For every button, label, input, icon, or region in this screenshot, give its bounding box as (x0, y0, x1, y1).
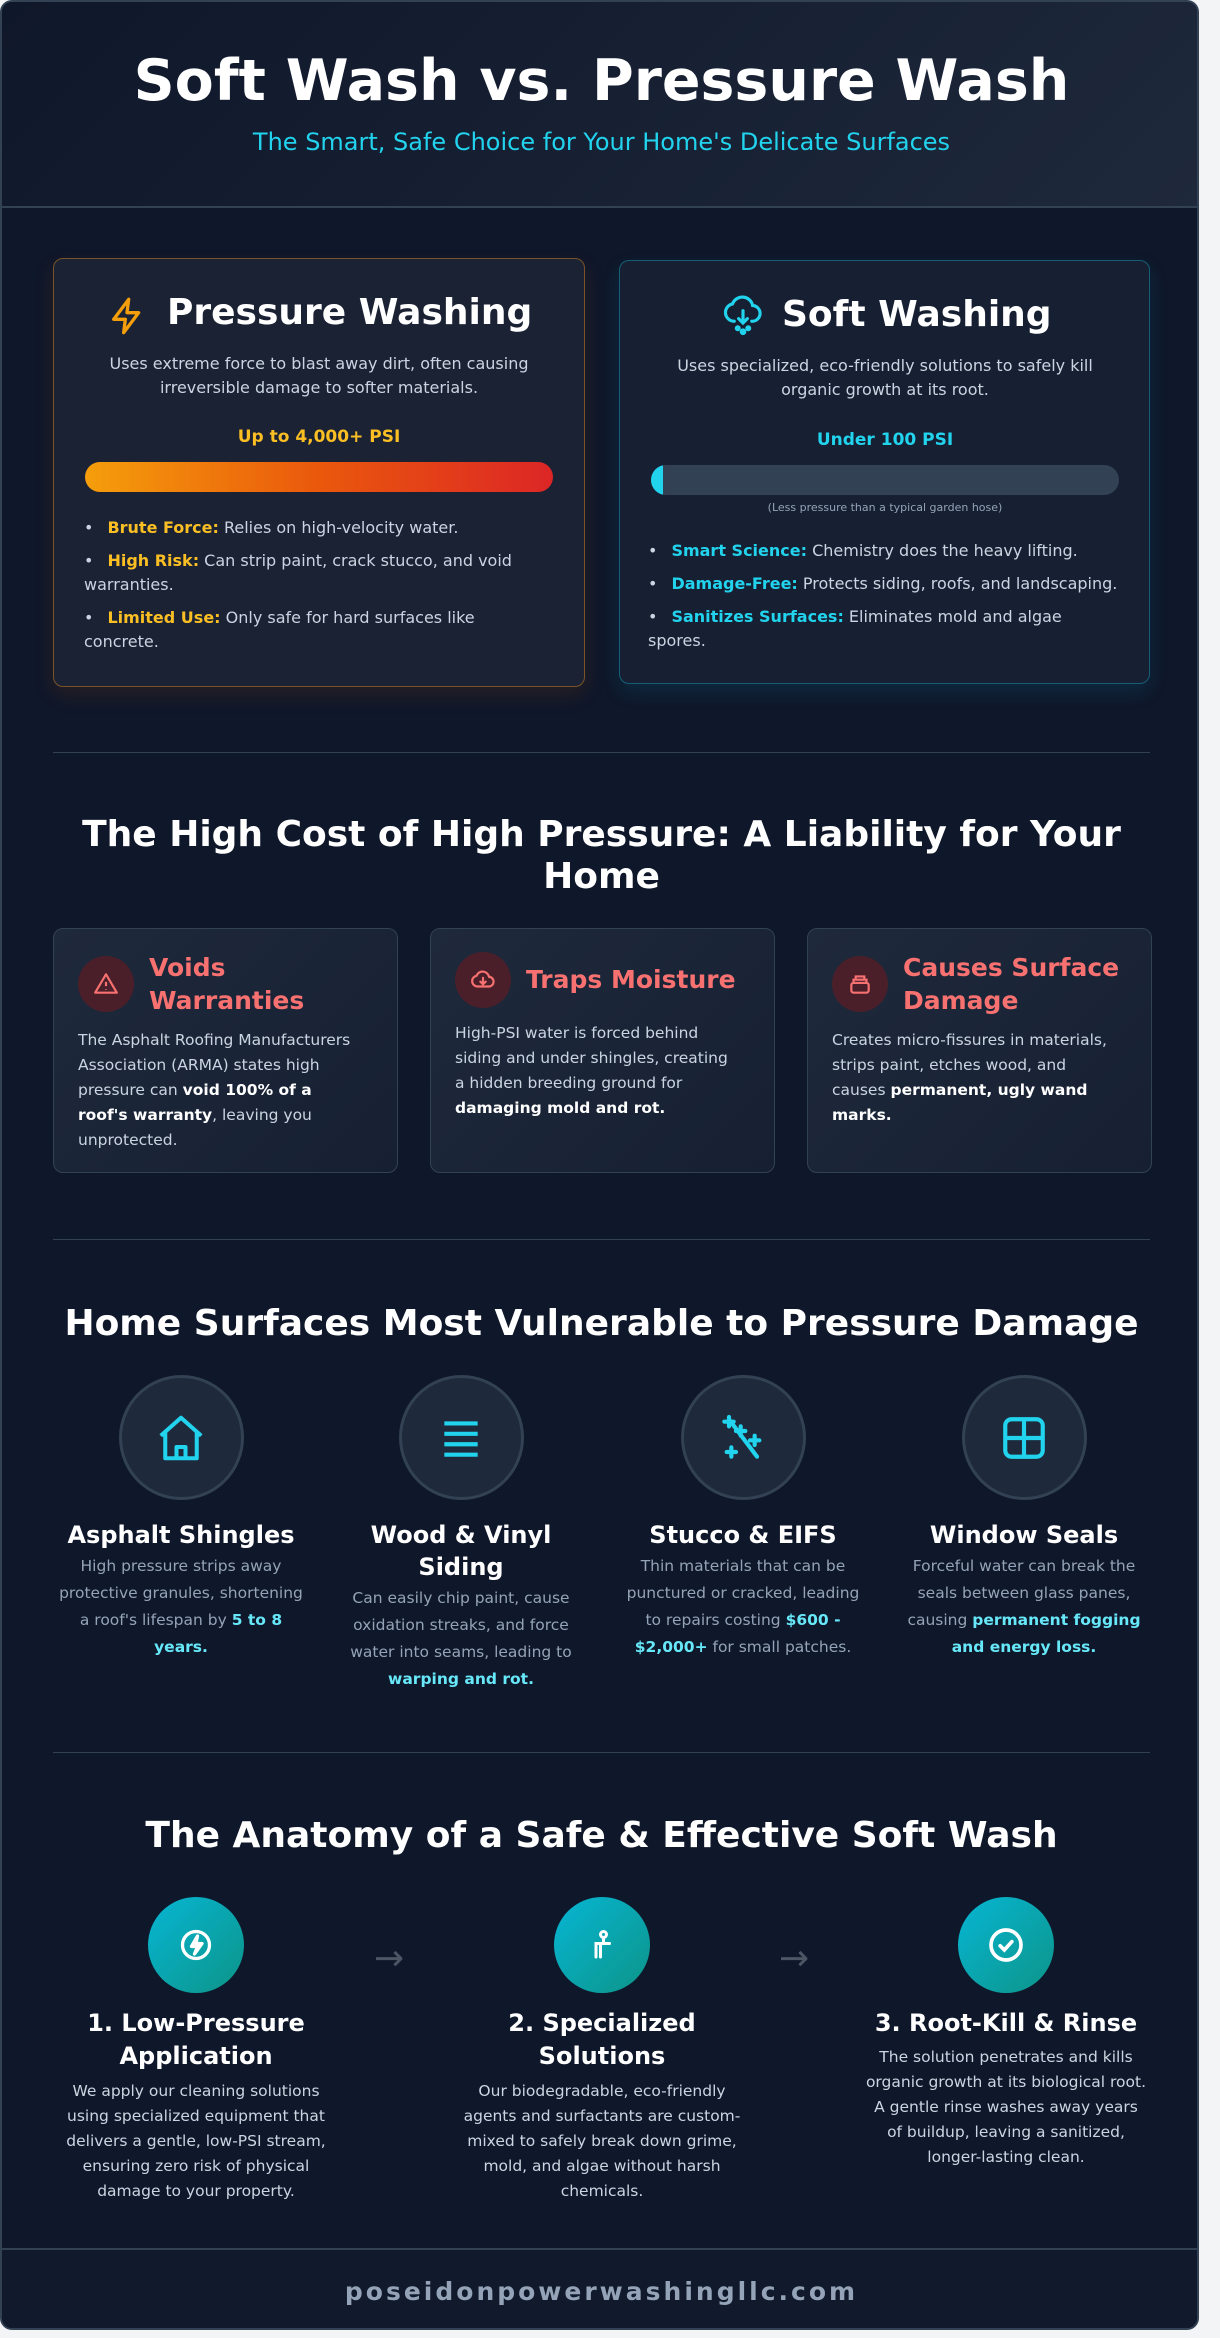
surface: siding (350, 1375, 572, 1688)
bullets: Brute Force: Relies on high-velocity water. (107, 518, 458, 537)
icon: cloud (724, 296, 762, 336)
bullets: Sanitizes Surfaces: Eliminates mold and algae spores. (648, 607, 1062, 650)
step 2 (464, 1897, 740, 2200)
surface: shingles: Asphalt Shingles (67, 1521, 295, 1549)
panel: pressure washing (53, 258, 585, 687)
arrow: → (779, 1938, 809, 1979)
step 2: 2. Specialized Solutions (508, 2009, 696, 2070)
psi label: Under 100 PSI (817, 430, 953, 450)
surface: stucco (627, 1375, 859, 1656)
icon: check (958, 1897, 1054, 1993)
bullets (648, 541, 1117, 650)
icon: lines (398, 1375, 524, 1500)
icon: layers (832, 956, 888, 1012)
icon: lightning (112, 298, 140, 334)
title: Soft Wash vs. Pressure Wash (134, 48, 1069, 114)
card: voids warranties (53, 928, 398, 1173)
footer (2, 2248, 1201, 2332)
surface: shingles (59, 1375, 303, 1656)
panel: soft washing (619, 260, 1150, 684)
card: surface damage (807, 928, 1152, 1173)
footer url: poseidonpowerwashingllc.com (345, 2277, 858, 2306)
card: traps moisture (430, 928, 775, 1173)
icon: window (962, 1375, 1086, 1500)
bullets: High Risk: Can strip paint, crack stucco, and void warranties. (84, 551, 512, 594)
card: traps moisture: High-PSI water is forced behind siding and under shingles, creating a hidden breeding ground for damaging mold and rot. (455, 1024, 728, 1117)
note: (Less pressure than a typical garden hose) (768, 501, 1002, 514)
surface: windows (907, 1375, 1141, 1656)
arrow: → (374, 1938, 404, 1979)
surface: siding: Can easily chip paint, cause oxidation streaks, and force water into seams, leading to warping and rot. (350, 1589, 572, 1688)
subtitle: The Smart, Safe Choice for Your Home's Delicate Surfaces (253, 128, 950, 156)
icon: gauge (148, 1897, 244, 1993)
card: voids warranties: The Asphalt Roofing Manufacturers Association (ARMA) states high pressure can void 100% of a roof's warranty, leaving you unprotected. (78, 1031, 350, 1149)
step 2: Our biodegradable, eco-friendly agents and surfactants are custom-mixed to safely break down grime, mold, and algae without harsh chemicals. (464, 2082, 740, 2200)
card: voids warranties: Voids Warranties (149, 953, 304, 1015)
icon: spray (554, 1897, 650, 1993)
step 3: The solution penetrates and kills organic growth at its biological root. A gentle rinse washes away years of buildup, leaving a sanitized, longer-lasting clean. (866, 2048, 1146, 2166)
icon: warning (78, 956, 134, 1012)
surface: shingles: High pressure strips away protective granules, shortening a roof's lifespan by 5 to 8 years. (59, 1557, 303, 1656)
bullets (84, 518, 512, 651)
header (2, 2, 1201, 208)
bullets: Limited Use: Only safe for hard surfaces like concrete. (84, 608, 475, 651)
heading: Pressure Washing (167, 292, 532, 333)
step 1 (66, 1897, 326, 2200)
step 1: 1. Low-Pressure Application (87, 2009, 305, 2070)
description: Uses extreme force to blast away dirt, often causing irreversible damage to softer materials. (109, 354, 528, 397)
surface: windows: Window Seals (930, 1521, 1118, 1549)
heading: vulnerable surfaces: Home Surfaces Most Vulnerable to Pressure Damage (64, 1303, 1139, 1344)
description: Uses specialized, eco-friendly solutions to safely kill organic growth at its root. (677, 356, 1093, 399)
surface: windows: Forceful water can break the seals between glass panes, causing permanent fogging and energy loss. (907, 1557, 1141, 1656)
icon: cloud download (455, 952, 511, 1008)
step 3: 3. Root-Kill & Rinse (875, 2009, 1137, 2037)
surface: stucco: Stucco & EIFS (649, 1521, 837, 1549)
bar (85, 462, 553, 492)
bar (651, 465, 1119, 495)
bullets: Damage-Free: Protects siding, roofs, and landscaping. (671, 574, 1117, 593)
card: surface damage: Causes Surface Damage (903, 953, 1119, 1015)
step 3 (866, 1897, 1146, 2166)
bullets: Smart Science: Chemistry does the heavy lifting. (671, 541, 1078, 560)
heading: Soft Washing (782, 294, 1052, 335)
icon: sparkle (680, 1375, 806, 1500)
heading: anatomy: The Anatomy of a Safe & Effective Soft Wash (145, 1815, 1058, 1856)
psi label: Up to 4,000+ PSI (238, 427, 400, 447)
icon: house (118, 1375, 244, 1500)
heading: high cost: The High Cost of High Pressure: A Liability for Your Home (82, 814, 1121, 897)
card: surface damage: Creates micro-fissures in materials, strips paint, etches wood, and causes permanent, ugly wand marks. (832, 1031, 1107, 1124)
surface: stucco: Thin materials that can be punctured or cracked, leading to repairs costing $600 - $2,000+ for small patches. (627, 1557, 859, 1656)
surface: siding: Wood & Vinyl Siding (371, 1521, 551, 1581)
card: traps moisture: Traps Moisture (526, 965, 736, 994)
step 1: We apply our cleaning solutions using specialized equipment that delivers a gentle, low-PSI stream, ensuring zero risk of physical damage to your property. (66, 2082, 326, 2200)
